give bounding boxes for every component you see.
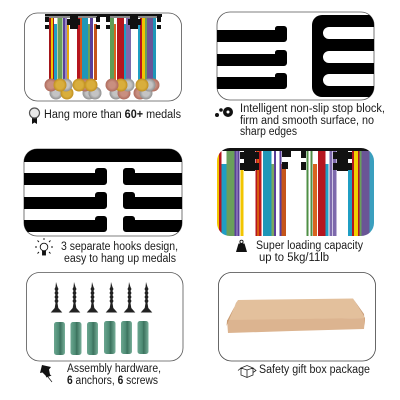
caption: stop block: firm and smooth surface, no [240, 115, 374, 127]
icon: medal [30, 108, 40, 124]
caption: loading capacity: Super loading capacity [256, 240, 363, 252]
medals [44, 78, 160, 100]
caption: stop block [240, 103, 385, 138]
panel: non-slip stop block [217, 12, 374, 100]
icon: weight [236, 240, 247, 252]
icon: push pin [40, 365, 52, 382]
caption: stop block: Intelligent non-slip stop block, [240, 103, 385, 115]
caption: medals: Hang more than 60+ medals [44, 109, 181, 121]
icon: gears [215, 107, 233, 117]
panel: ribbons close-up [217, 148, 374, 236]
caption: hardware: Assembly hardware, [67, 363, 161, 375]
panel: hardware [26, 272, 183, 361]
caption: hardware: 6 anchors, 6 screws [67, 375, 158, 387]
wall brackets [240, 148, 352, 171]
caption: loading capacity [256, 240, 363, 264]
hook bars [24, 148, 182, 232]
panel: three hooks [24, 148, 182, 236]
wall rack bar [45, 14, 162, 29]
caption: stop block: sharp edges [240, 126, 297, 138]
icon: light bulb [35, 238, 53, 255]
ribbon stripes [217, 148, 374, 236]
caption: gift box: Safety gift box package [259, 364, 370, 376]
caption: hooks: easy to hang up medals [64, 253, 176, 265]
screws [51, 282, 152, 312]
anchors [54, 321, 148, 355]
left hooks and right block [217, 15, 374, 97]
caption: loading capacity: up to 5kg/11lb [259, 252, 329, 264]
caption: hardware [67, 363, 161, 387]
medal ribbons [49, 17, 156, 84]
caption: hooks [61, 241, 178, 265]
cardboard box [226, 298, 365, 333]
panel: medal rack [24, 13, 182, 101]
caption: hooks: 3 separate hooks design, [61, 241, 178, 253]
icon: box [238, 366, 256, 378]
panel: gift box [218, 272, 376, 361]
